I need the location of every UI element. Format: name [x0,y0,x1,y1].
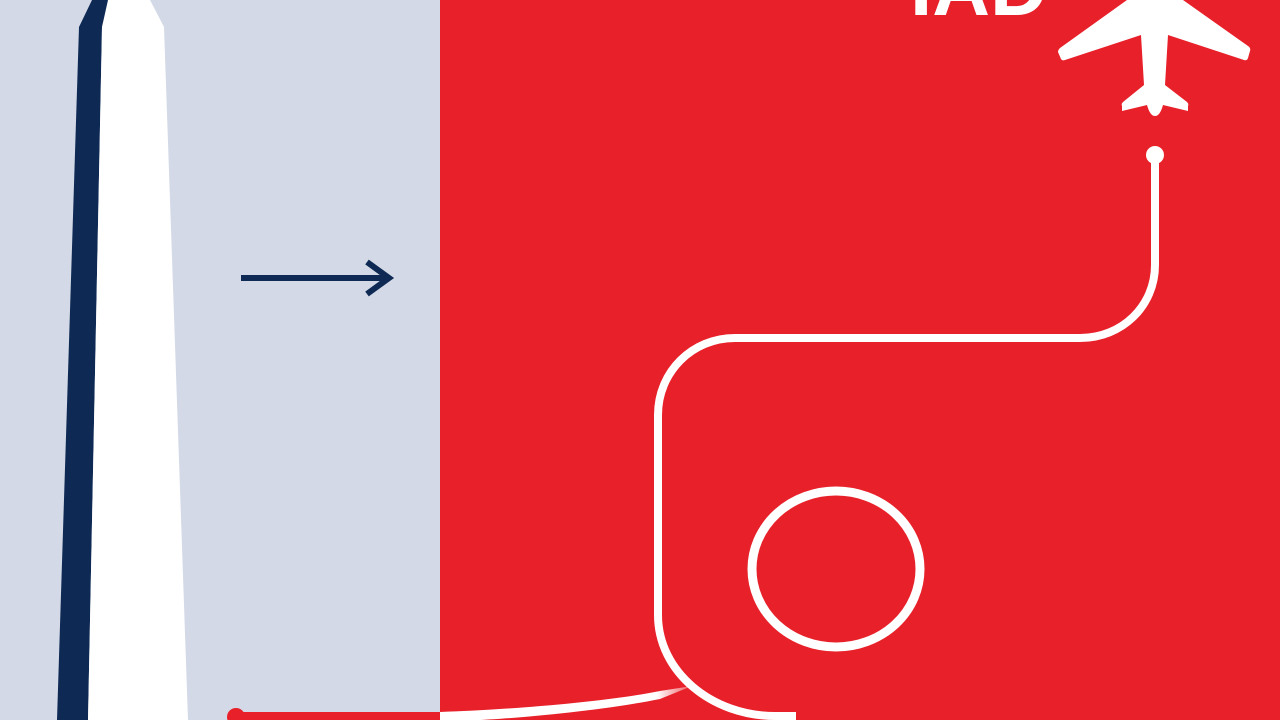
route line: dotted start to airplane [658,146,1164,716]
route line: red segment with end dot [227,708,440,720]
icon: obelisk monument [57,0,188,720]
arrow: pointing right [241,262,389,294]
ring: roundabout circle [752,491,920,647]
obelisk shaded side [57,0,109,720]
icon: airplane [1058,0,1250,116]
route line: white tapered arc [440,686,692,720]
panel: red right background [440,0,1280,720]
obelisk lit side [88,0,188,720]
panel: pale blue left background [0,0,440,720]
